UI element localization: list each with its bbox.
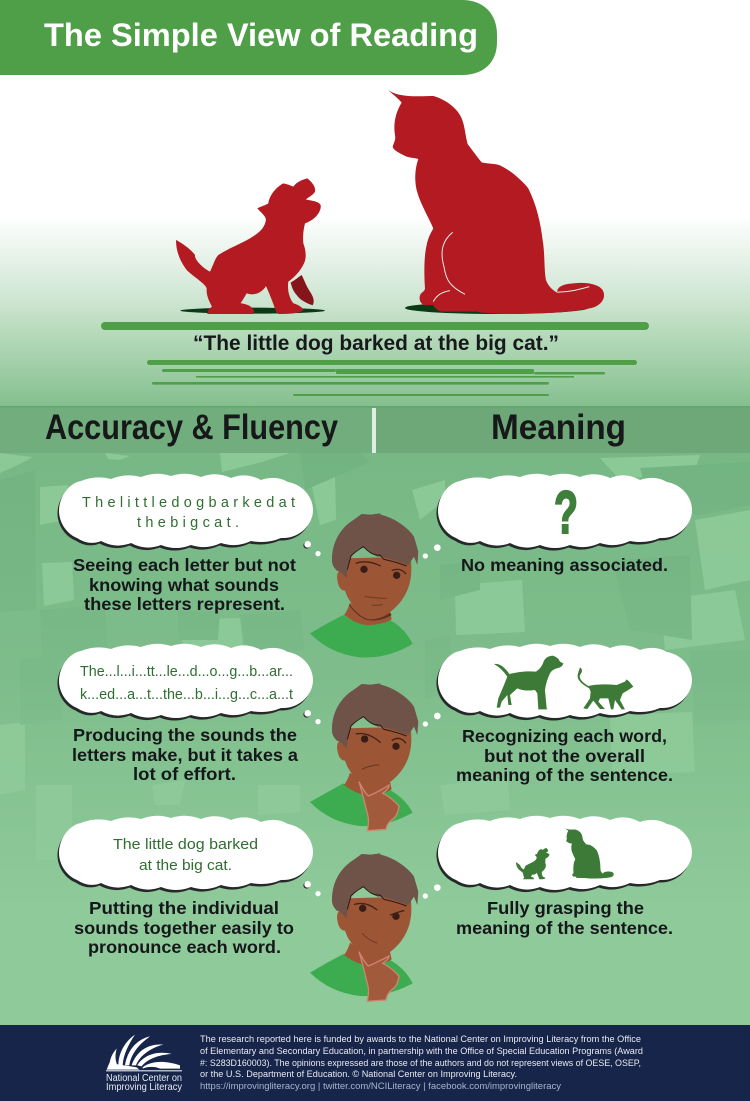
footer credit text (200, 1034, 643, 1092)
icon: small dog (516, 848, 549, 879)
ground lines (101, 322, 649, 396)
red dog silhouette (176, 178, 321, 314)
row 1 left: bubble (58, 474, 313, 550)
logo: name (106, 1073, 182, 1093)
thought dots (303, 881, 441, 899)
row 3 right: caption: Fully grasping the (487, 898, 644, 918)
row 2 left: caption: Producing the sounds the (73, 725, 297, 745)
footer credit text: #: S283D160003). The opinions expressed are those of the authors and do not represent views of OESE, OSEP, (200, 1058, 641, 1069)
row 2 left: caption (72, 725, 298, 784)
row 1 left: caption (73, 555, 296, 614)
footer credit text: The research reported here is funded by awards to the National Center on Improving Literacy from the Office (200, 1034, 641, 1045)
footer logo (106, 1035, 182, 1093)
icon: small cat (565, 828, 614, 879)
thought dots (303, 541, 441, 559)
row 1 left: caption: knowing what sounds (89, 575, 279, 595)
footer credit text: https://improvingliteracy.org | twitter.com/NCILiteracy | facebook.com/improvingliteracy (200, 1081, 561, 1092)
row 1 right: caption: No meaning associated. (461, 555, 668, 575)
row 1 left: bubble: Thelittledogbarkedat (82, 495, 295, 511)
row 2 right: bubble with separate dog and cat (436, 644, 692, 720)
logo: book and arcs (106, 1035, 182, 1071)
row 2 right: caption: meaning of the sentence. (456, 765, 673, 785)
row 2 left: bubble: k...ed...a...t...the...b...i...g...c...a...t (80, 687, 293, 703)
icon: standing dog (494, 656, 563, 709)
title banner (0, 0, 497, 75)
cat ground shadow (405, 302, 588, 314)
dog ground shadow (180, 308, 325, 314)
row 3: person, thinking with smile (303, 853, 441, 1001)
footer band (0, 1025, 750, 1101)
row 2: person, thinking with frown (303, 683, 441, 831)
row 2 left: bubble (58, 644, 313, 720)
row 3 right: caption (456, 898, 673, 938)
red cat silhouette (387, 89, 604, 314)
section header bands (0, 406, 750, 453)
logo: name: National Center on (106, 1073, 182, 1084)
row 3 left: bubble: The little dog barked (113, 837, 258, 853)
row 1: person, neutral (303, 513, 441, 658)
row 2 left: bubble: The...l...i...tt...le...d...o...g...b...ar... (80, 664, 293, 680)
row 3 left: caption: sounds together easily to (74, 918, 294, 938)
top background gradient (0, 0, 750, 407)
hand on chin (359, 952, 399, 1001)
row 1 right: bubble with question mark: ? (554, 479, 578, 546)
icon: walking cat (578, 667, 633, 709)
row 2 right: caption: Recognizing each word, (462, 726, 667, 746)
title banner: The Simple View of Reading (44, 17, 478, 53)
row 3 right: caption: meaning of the sentence. (456, 918, 673, 938)
footer credit text: or the U.S. Department of Education. © National Center on Improving Literacy. (200, 1069, 517, 1080)
row 1 left: caption: these letters represent. (84, 594, 285, 614)
hand on chin (359, 782, 399, 831)
row 3 left: caption: Putting the individual (89, 898, 279, 918)
illustration: dog barking at cat (176, 89, 604, 314)
row 3 left: caption: pronounce each word. (88, 937, 281, 957)
row 3 right: bubble with dog barking at cat (436, 816, 692, 892)
row 3 left: caption (74, 898, 294, 957)
row 2 left: caption: lot of effort. (133, 764, 236, 784)
heading: Accuracy & Fluency: Accuracy & Fluency (45, 408, 338, 447)
row 3 left: bubble (58, 816, 313, 892)
row 1 left: caption: Seeing each letter but not (73, 555, 296, 575)
sentence quote: “The little dog barked at the big cat.” (193, 332, 559, 355)
thought dots (303, 710, 441, 727)
row 1 right: bubble with question mark (436, 474, 692, 550)
row 2 right: caption (456, 726, 673, 785)
row 2 left: caption: letters make, but it takes a (72, 745, 298, 765)
row 2 right: caption: but not the overall (484, 746, 645, 766)
heading: Meaning: Meaning (491, 408, 626, 447)
row 3 left: bubble: at the big cat. (139, 858, 232, 874)
logo: name: Improving Literacy (106, 1082, 182, 1093)
lower panel background (0, 453, 750, 1025)
footer credit text: of Elementary and Secondary Education, in partnership with the Office of Special Education Programs (Award (200, 1046, 643, 1057)
row 1 left: bubble: thebigcat. (137, 515, 239, 531)
